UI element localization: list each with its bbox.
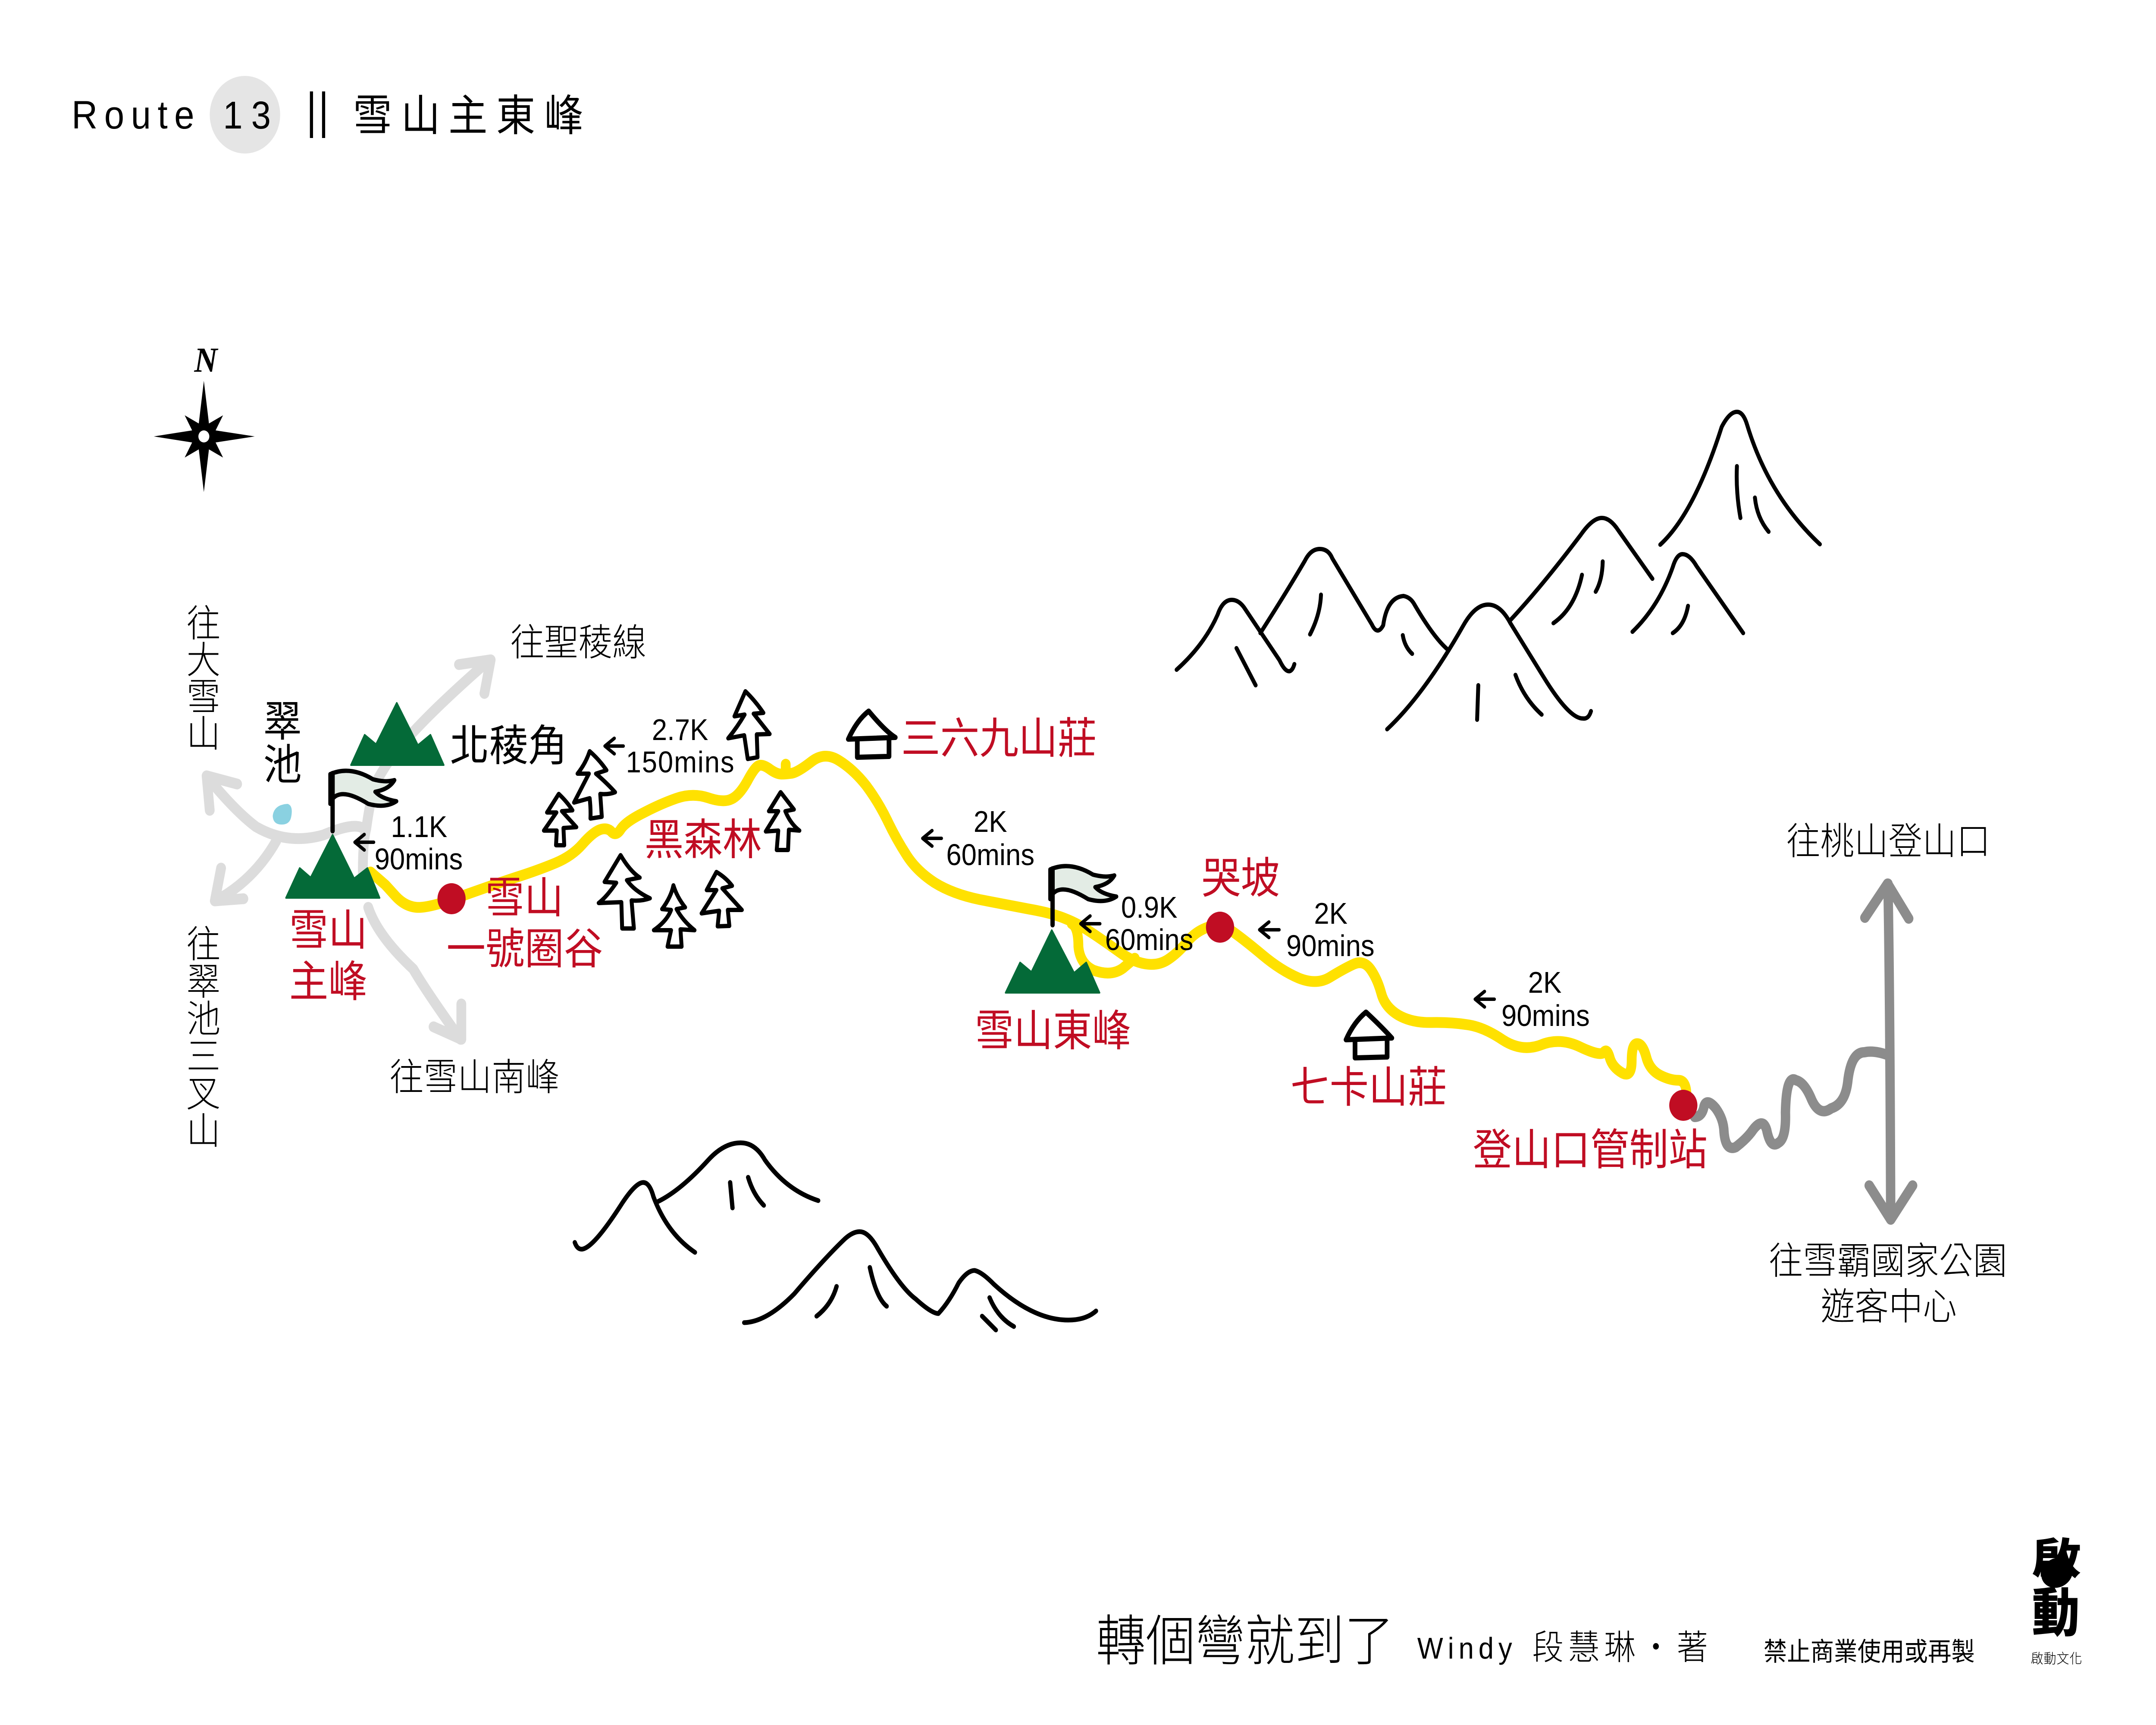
label: 七卡山莊: 七卡山莊	[1291, 1064, 1447, 1112]
waypoint: 登山口管制站	[1669, 1090, 1697, 1121]
main yellow route	[370, 756, 1686, 1095]
icon: 東峰 flag	[1050, 866, 1116, 925]
author chinese name: 段慧琳・著	[1532, 1629, 1708, 1667]
title	[72, 76, 583, 154]
icon: 三六九山莊 hut	[848, 711, 895, 757]
segment: 1.1K 90mins: 1.1K	[391, 810, 447, 844]
segment: 0.9K 60mins: 0.9K	[1121, 891, 1177, 925]
waypoint: 雪山一號圈谷	[438, 883, 466, 914]
grey side trails around main peak	[207, 660, 491, 1039]
segment: 1.1K 90mins	[355, 810, 463, 876]
label: 翠池: 翠池	[263, 698, 302, 788]
segment: 2K 60mins: 2K	[974, 805, 1007, 839]
lower mountains	[575, 1143, 1096, 1330]
direction labels, grey trail destinations	[186, 602, 2007, 1328]
segment: 2K 60mins	[923, 805, 1034, 872]
segment: 2K 90mins near trailhead: 90mins	[1501, 999, 1590, 1033]
label: 雪山主峰: 主峰	[289, 958, 367, 1006]
segment: 2.7K 150mins	[605, 713, 735, 779]
label: 黑森林: 黑森林	[645, 816, 762, 864]
segment: 2K 90mins near 哭坡: 2K	[1314, 897, 1348, 931]
footer	[1096, 1611, 1975, 1672]
segment: 2K 90mins near trailhead	[1475, 966, 1590, 1033]
label: 往雪霸國家公園 遊客中心	[1769, 1240, 2007, 1328]
segment: 2K 90mins near 哭坡: 90mins	[1286, 929, 1375, 963]
route label: Route	[72, 92, 201, 137]
label: 雪山主峰: 雪山	[289, 907, 367, 955]
label: 往雪霸國家公園 遊客中心: 往雪霸國家公園	[1769, 1240, 2007, 1282]
publisher name: 啟動文化	[2031, 1651, 2082, 1666]
title separator	[311, 91, 323, 138]
compass	[154, 340, 255, 492]
label: 往大雪山: 往大雪山	[186, 602, 220, 755]
label: 雪山一號圈谷	[446, 875, 603, 973]
label: 登山口管制站: 登山口管制站	[1473, 1126, 1708, 1174]
book title: 轉個彎就到了	[1096, 1611, 1394, 1672]
label: 北稜角: 北稜角	[450, 722, 567, 770]
label: 往雪霸國家公園 遊客中心: 遊客中心	[1821, 1286, 1957, 1328]
segment: 0.9K 60mins	[1081, 891, 1194, 957]
label: 雪山東峰: 雪山東峰	[975, 1007, 1131, 1055]
route number badge	[210, 76, 280, 154]
icon: 雪山東峰 mountain	[1006, 930, 1100, 993]
label: 哭坡: 哭坡	[1202, 855, 1280, 903]
author latin name: Windy	[1417, 1632, 1517, 1665]
label: 雪山一號圈谷: 雪山	[485, 875, 564, 922]
icon: 翠池 pond	[273, 804, 292, 825]
red place labels	[289, 715, 1708, 1174]
title text: 雪山主東峰	[353, 92, 583, 140]
side loop to 東峰	[1072, 924, 1135, 973]
label: 往雪山南峰: 往雪山南峰	[389, 1056, 560, 1098]
logo character 動: 動	[2032, 1584, 2080, 1643]
trail to 大雪山	[207, 776, 364, 839]
trail to 三叉山	[215, 841, 276, 901]
waypoint: 哭坡	[1206, 912, 1234, 943]
label: 往聖稜線: 往聖稜線	[510, 621, 646, 664]
segment: 2.7K 150mins: 2.7K	[652, 713, 708, 747]
label: 雪山主峰	[289, 907, 367, 1006]
icon: 北稜角 mountain	[351, 703, 444, 765]
logo dot	[2037, 1553, 2077, 1593]
logo character 啟: 啟	[2032, 1535, 2081, 1584]
segment: 2.7K 150mins: 150mins	[626, 746, 735, 779]
icon: 七卡山莊 hut	[1346, 1012, 1392, 1058]
grey access road	[1695, 884, 1913, 1220]
icon: 主峰 flag	[330, 771, 396, 831]
trail to 雪山南峰	[368, 907, 461, 1039]
label: 三六九山莊: 三六九山莊	[901, 715, 1097, 763]
route number: 13	[223, 94, 279, 137]
segment: 0.9K 60mins: 60mins	[1105, 923, 1194, 957]
publisher logo	[2031, 1535, 2082, 1666]
segment: 2K 60mins: 60mins	[946, 838, 1034, 872]
segment: 2K 90mins near trailhead: 2K	[1528, 966, 1561, 1000]
compass centre	[198, 430, 209, 442]
label: 往翠池三叉山: 往翠池三叉山	[186, 923, 220, 1152]
segment: 1.1K 90mins: 90mins	[375, 843, 463, 876]
compass letter N: N	[194, 340, 219, 380]
trail to 聖稜線	[363, 660, 491, 887]
black place labels	[263, 698, 567, 788]
small bump	[780, 764, 791, 773]
upper right mountains	[1177, 412, 1820, 729]
label: 雪山一號圈谷: 一號圈谷	[446, 925, 603, 973]
usage notice: 禁止商業使用或再製	[1764, 1638, 1975, 1667]
label: 往桃山登山口: 往桃山登山口	[1786, 820, 1990, 862]
segment: 2K 90mins near 哭坡	[1260, 897, 1375, 963]
compass star	[154, 381, 255, 492]
icon: 雪山主峰 mountain	[286, 835, 379, 898]
double arrow	[1865, 884, 1913, 1220]
trees	[544, 691, 799, 947]
